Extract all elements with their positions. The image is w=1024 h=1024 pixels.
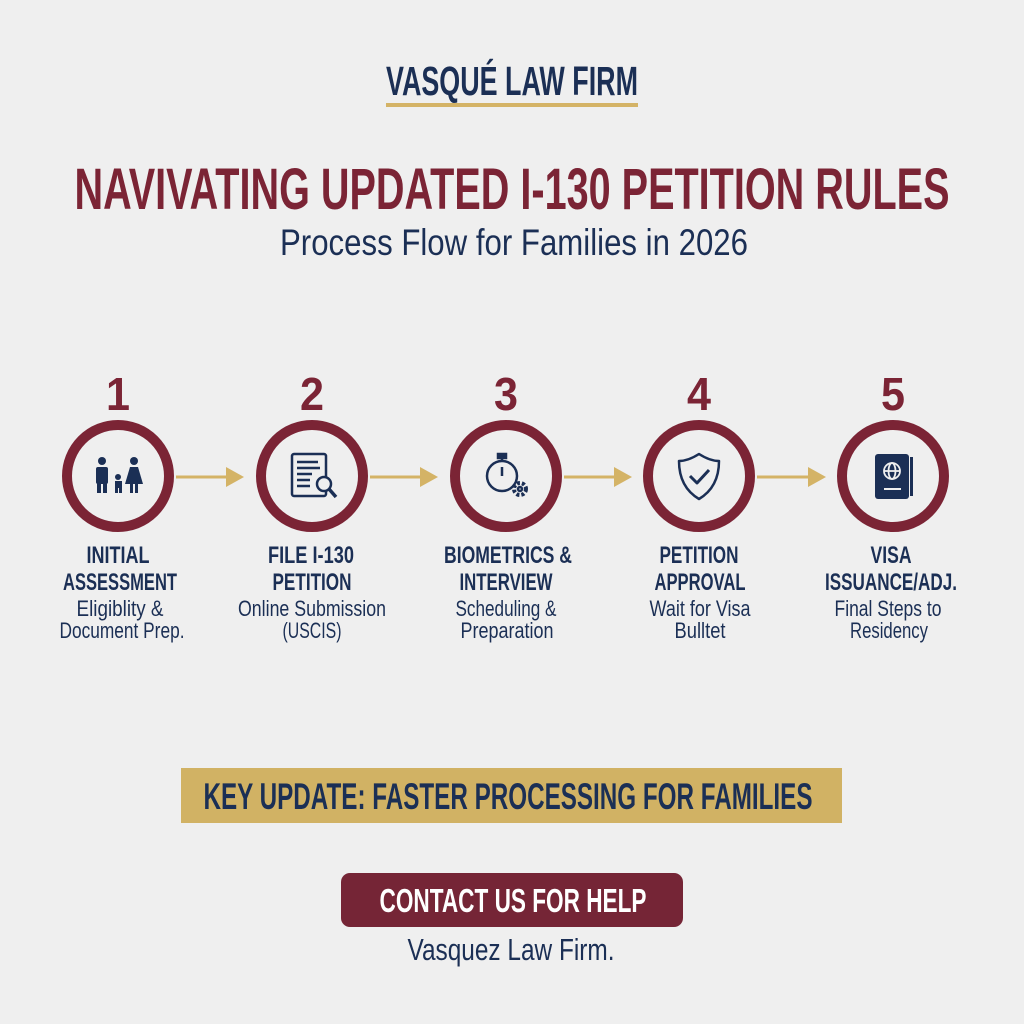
- icon: family: [96, 457, 143, 493]
- step 3: Scheduling &: [456, 596, 557, 621]
- icon: stopwatch with gear: [487, 454, 526, 495]
- step 3: INTERVIEW: [460, 569, 553, 596]
- step 4: Wait for Visa: [650, 596, 751, 621]
- step 3: Preparation: [460, 618, 554, 643]
- step 4: [648, 368, 751, 643]
- step 2: Online Submission: [238, 596, 386, 621]
- step 2: PETITION: [272, 569, 352, 596]
- step 1: Document Prep.: [60, 618, 184, 643]
- step 2: (USCIS): [282, 618, 342, 643]
- icon: passport: [875, 454, 913, 499]
- step 1: 1: [106, 368, 130, 420]
- icon: document search: [292, 454, 336, 497]
- step 5: [825, 368, 957, 643]
- step 5: ISSUANCE/ADJ.: [825, 569, 957, 596]
- arrows: [176, 467, 826, 487]
- header: firm name: VASQUÉ LAW FIRM: [386, 58, 638, 104]
- step 1: [60, 368, 184, 643]
- step 5: Residency: [850, 618, 928, 643]
- header: firm name: [386, 58, 638, 107]
- step 1: ASSESSMENT: [63, 569, 177, 596]
- step 3: BIOMETRICS &: [444, 542, 572, 569]
- contact button: [341, 873, 683, 927]
- step 5: 5: [881, 368, 905, 420]
- icon: shield check: [679, 454, 719, 499]
- step 5: VISA: [870, 542, 912, 569]
- step 2: FILE I-130: [268, 542, 354, 569]
- step 1: Eligiblity &: [76, 596, 164, 621]
- step 4: PETITION: [660, 542, 738, 569]
- subtitle: Process Flow for Families in 2026: [280, 222, 748, 263]
- step 1: INITIAL: [86, 542, 150, 569]
- contact button: CONTACT US FOR HELP: [380, 882, 646, 919]
- step 4: 4: [687, 368, 711, 420]
- step 2: [238, 368, 386, 643]
- step 4: APPROVAL: [654, 569, 746, 596]
- step 4: Bulltet: [674, 618, 726, 643]
- key update banner: [181, 768, 842, 823]
- footer firm name: Vasquez Law Firm.: [408, 932, 614, 967]
- step 3: [444, 368, 572, 643]
- step 3: 3: [494, 368, 518, 420]
- step 5: Final Steps to: [834, 596, 942, 621]
- step 2: 2: [300, 368, 324, 420]
